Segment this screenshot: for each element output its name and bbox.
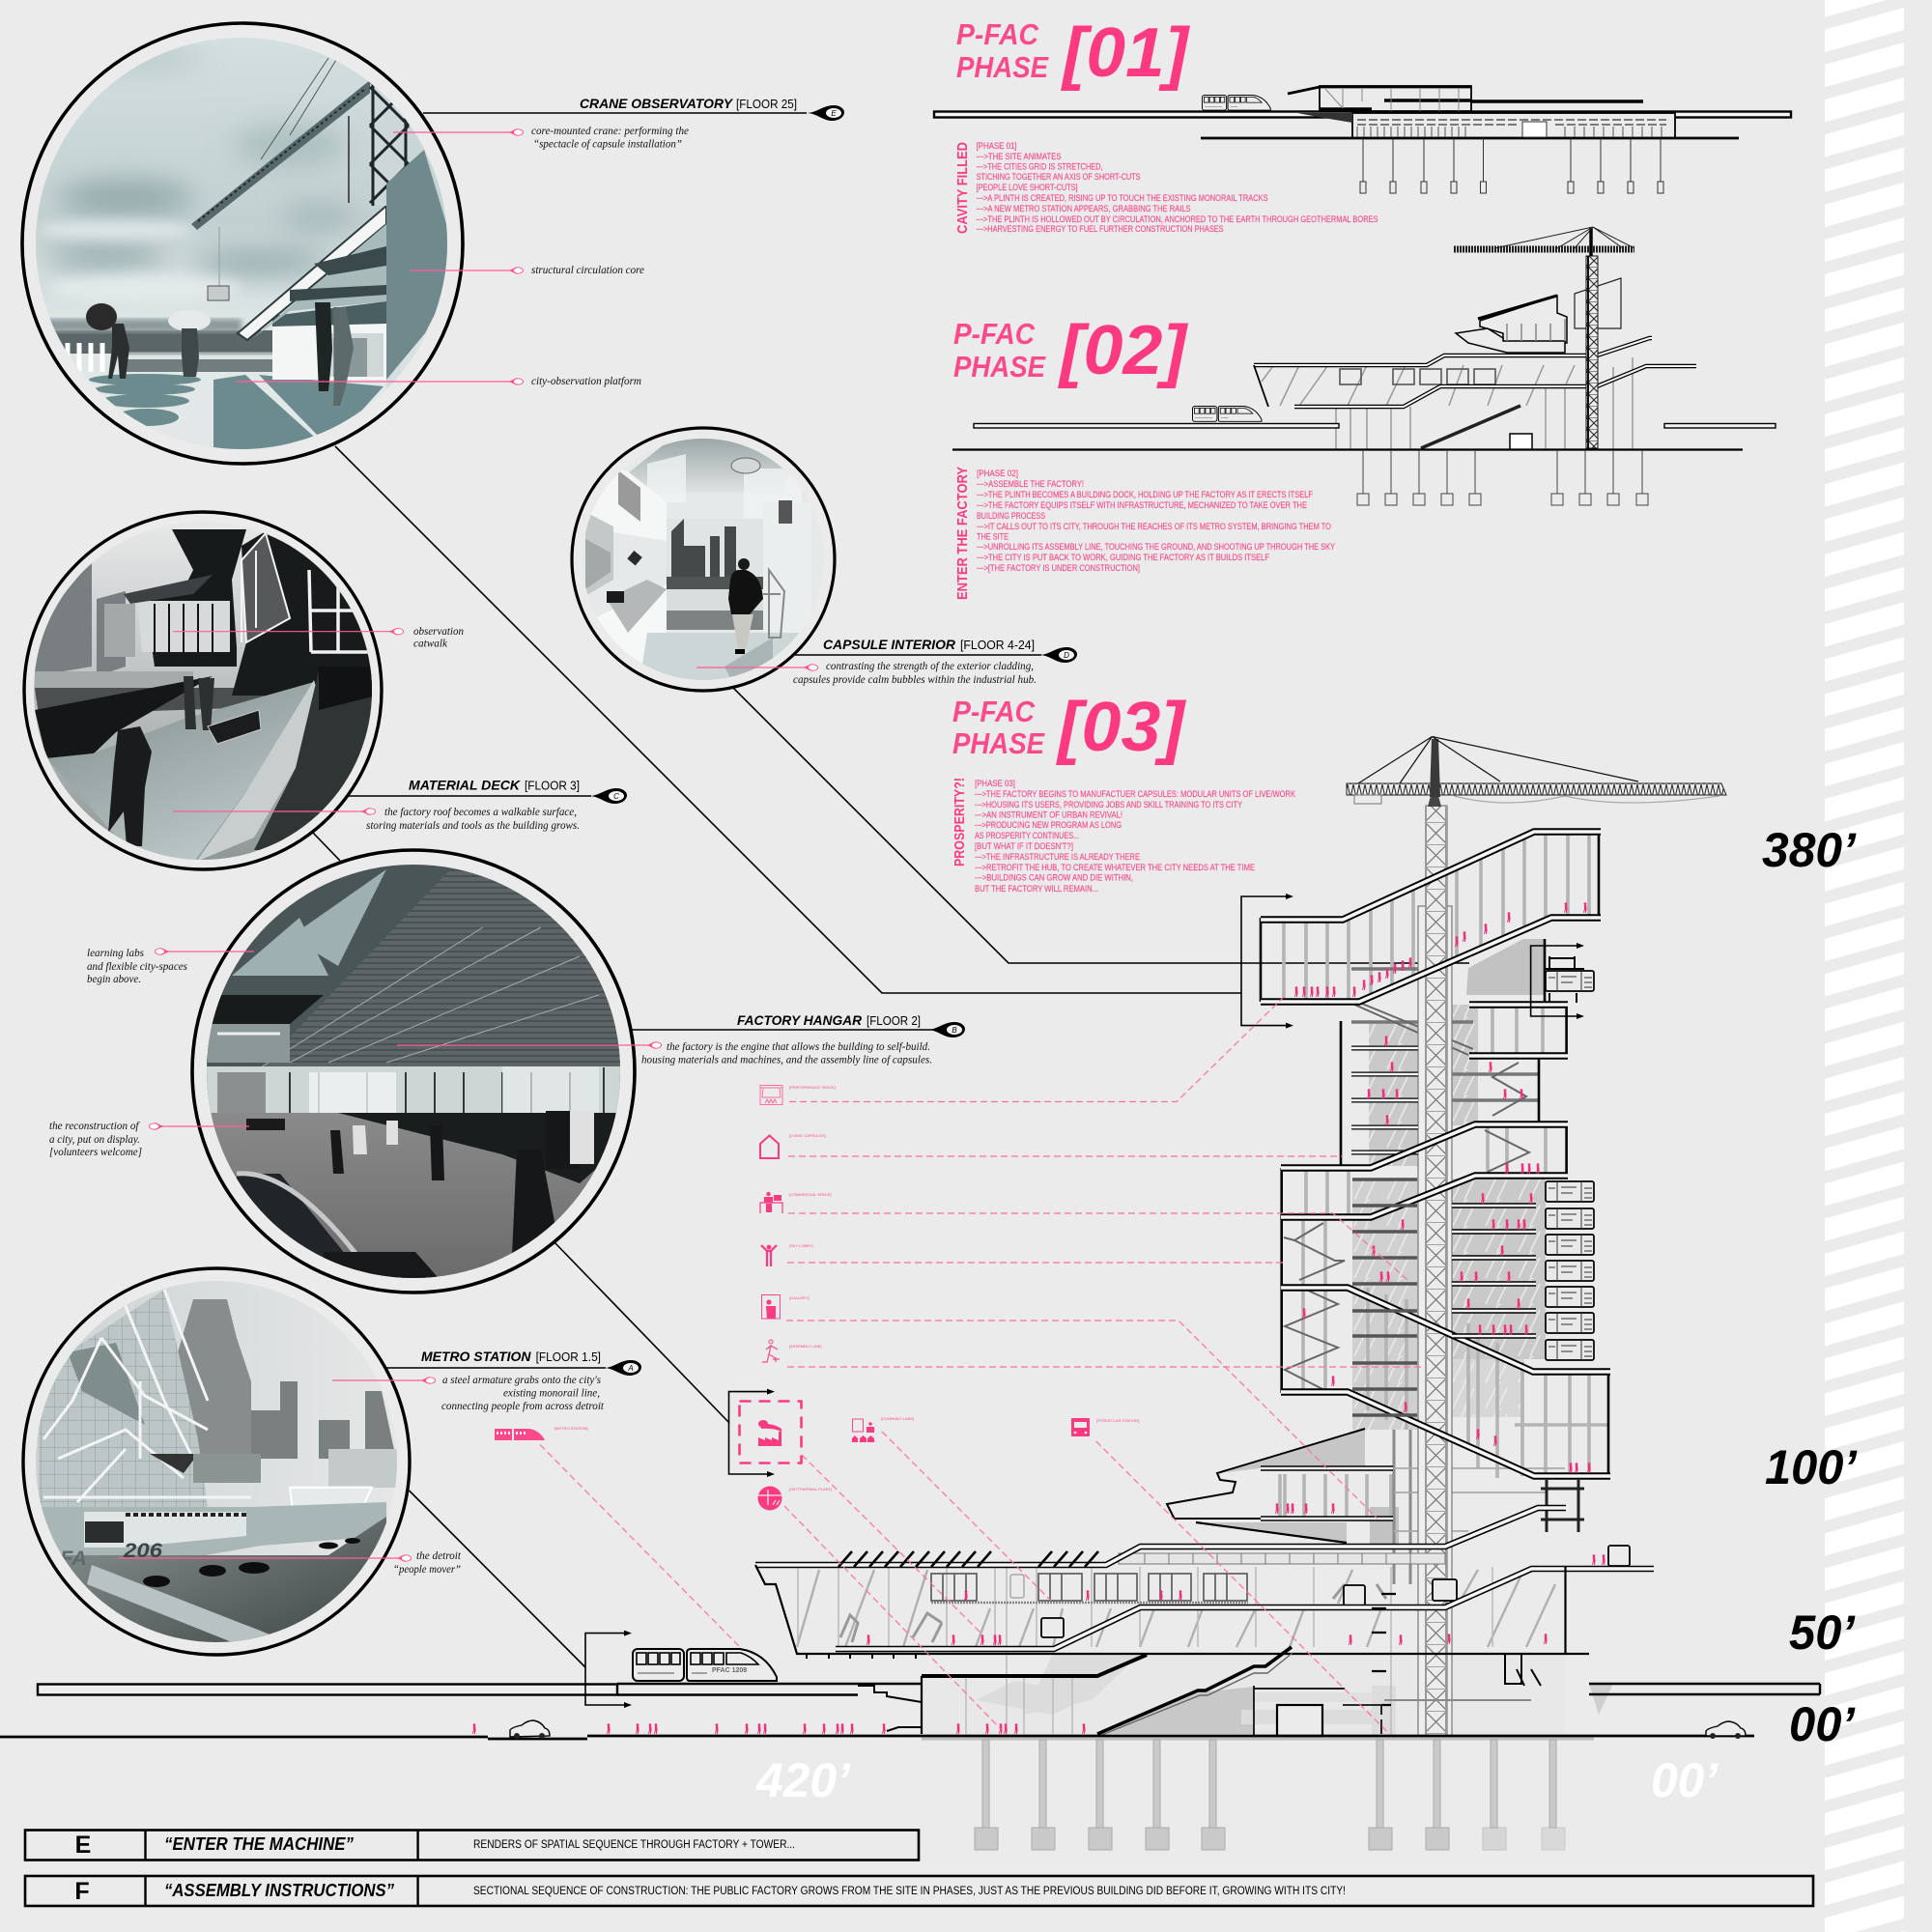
icon: commercial space: [COMMERCIAL SPACE] [789, 1192, 832, 1197]
annotation: learning labs [87, 948, 254, 985]
label: factory hangar: FACTORY HANGAR [737, 1012, 863, 1028]
icon: learning labs: [LEARNING LABS] [881, 1416, 914, 1421]
label: factory hangar: housing materials and machines, and the assembly line of capsules. [641, 1055, 932, 1066]
label: capsule interior: capsules provide calm bubbles within the industrial hub. [793, 674, 1037, 686]
text: enter the factory [954, 467, 1336, 600]
icon: assembly line: [ASSEMBLY LINE] [789, 1344, 821, 1349]
tower crane mast [1418, 806, 1452, 1736]
label: material deck [173, 777, 627, 832]
text: cavity filled: --->A NEW METRO STATION APPEARS, GRABBING THE RAILS [977, 204, 1191, 214]
heading: phase 02 [953, 312, 1188, 389]
text: enter the factory: --->THE FACTORY EQUIPS ITSELF WITH INFRASTRUCTURE, MECHANIZED TO TAKE OVER THE [977, 500, 1307, 511]
height marker: 00 ft: 00’ [1789, 1697, 1856, 1751]
title bar: F assembly instructions [25, 1876, 1813, 1906]
text: enter the factory: --->UNROLLING ITS ASSEMBLY LINE, TOUCHING THE GROUND, AND SHOOTING UP THROUGH THE SKY [977, 542, 1336, 553]
annotation: observation catwalk [173, 626, 464, 649]
label: metro station: [FLOOR 1.5] [536, 1350, 601, 1364]
label: metro station: existing monorail line, [503, 1387, 600, 1399]
text: enter the factory: THE SITE [977, 531, 1009, 543]
label: crane observatory [423, 96, 844, 121]
text: prosperity: --->THE FACTORY BEGINS TO MANUFACTUER CAPSULES: MODULAR UNITS OF LIVE/WORK [975, 789, 1296, 800]
text: cavity filled: [PEOPLE LOVE SHORT-CUTS] [977, 183, 1078, 193]
icon: living capsules [760, 1133, 826, 1158]
heading: phase 01: P-FAC [956, 17, 1039, 51]
render: factory hangar [192, 850, 635, 1293]
car right [1706, 1721, 1746, 1739]
title bar: E enter the machine [25, 1830, 919, 1861]
heading: phase 02: [02] [1058, 312, 1188, 389]
text: cavity filled: CAVITY FILLED [954, 142, 971, 234]
height marker: 380 ft: 380’ [1762, 823, 1857, 877]
text: prosperity: --->THE INFRASTRUCTURE IS ALREADY THERE [975, 852, 1140, 863]
text: prosperity: BUT THE FACTORY WILL REMAIN... [975, 884, 1098, 895]
text: enter the factory: --->THE CITY IS PUT BACK TO WORK, GUIDING THE FACTORY AS IT BUILDS ITSELF [977, 553, 1269, 563]
heading: phase 01 [956, 14, 1190, 92]
text: enter the factory: ENTER THE FACTORY [954, 467, 971, 600]
text: prosperity: --->HOUSING ITS USERS, PROVIDING JOBS AND SKILL TRAINING TO ITS CITY [975, 800, 1243, 810]
ground line [0, 1727, 1754, 1739]
mast lattice [1425, 806, 1447, 1736]
icon: factory [740, 1401, 802, 1463]
section drawing: factory and tower, phase 03 [0, 736, 1820, 1850]
label: metro station: METRO STATION [421, 1349, 531, 1364]
icon: streetcar station [1071, 1418, 1139, 1436]
annotation: observation catwalk: catwalk [413, 638, 448, 649]
text: cavity filled [954, 141, 1378, 235]
label: crane observatory: CRANE OBSERVATORY [580, 96, 734, 111]
render: metro station: 206 [123, 1540, 162, 1562]
text: prosperity: [PHASE 03] [975, 779, 1015, 789]
label: crane observatory: [FLOOR 25] [736, 97, 797, 111]
label: crane observatory: E [831, 109, 837, 118]
text: prosperity: --->PRODUCING NEW PROGRAM AS LONG [975, 820, 1122, 831]
annotation: core-mounted crane [393, 126, 689, 151]
main monorail train: PFAC 1208 [712, 1667, 747, 1674]
label: capsule interior: [FLOOR 4-24] [960, 638, 1035, 652]
label: capsule interior: contrasting the strength of the exterior cladding, [826, 661, 1034, 672]
heading: phase 02: P-FAC [953, 317, 1036, 351]
label: material deck: MATERIAL DECK [409, 777, 521, 792]
text: prosperity: [BUT WHAT IF IT DOESN'T?] [975, 841, 1073, 852]
label: capsule interior: CAPSULE INTERIOR [823, 637, 956, 652]
icon: gallery: [GALLERY] [789, 1295, 810, 1300]
annotation: city-observation platform [236, 376, 641, 387]
heading: phase 01: PHASE [956, 50, 1049, 84]
icon: metro station train [495, 1426, 588, 1440]
title bar: E enter the machine: RENDERS OF SPATIAL SEQUENCE THROUGH FACTORY + TOWER... [473, 1839, 795, 1851]
heading: phase 03: P-FAC [952, 695, 1036, 728]
icon: geothermal plant [757, 1486, 832, 1511]
annotation: learning labs: learning labs [87, 948, 145, 959]
annotation: detroit people mover: the detroit [416, 1550, 462, 1562]
annotation: structural circulation core: structural circulation core [531, 265, 644, 276]
annotation: detroit people mover: “people mover” [393, 1564, 461, 1576]
text: enter the factory: --->IT CALLS OUT TO ITS CITY, THROUGH THE REACHES OF ITS METRO SYSTEM, BRINGING THEM TO [977, 522, 1331, 532]
icon: geothermal plant: [GEOTHERMAL PLANT] [789, 1487, 832, 1492]
label: capsule interior [696, 637, 1077, 686]
icon: assembly line [762, 1340, 821, 1362]
icon: performance space [760, 1085, 836, 1105]
annotation: city-observation platform: city-observation platform [531, 376, 641, 387]
text: prosperity: --->AN INSTRUMENT OF URBAN REVIVAL! [975, 810, 1122, 821]
icon: streetcar station: [STREETCAR STATION] [1096, 1418, 1139, 1423]
heading: phase 03: PHASE [952, 726, 1045, 760]
icon: learning labs [852, 1416, 914, 1442]
label: material deck: C [613, 792, 619, 801]
title bar: E enter the machine: E [75, 1832, 91, 1859]
lower right cross frames [1541, 1480, 1584, 1532]
width marker: 420 ft: 420’ [755, 1753, 851, 1807]
label: metro station [332, 1349, 641, 1412]
heading: phase 03 [952, 689, 1186, 766]
heading: phase 03: [03] [1056, 689, 1186, 766]
text: prosperity: --->BUILDINGS CAN GROW AND DIE WITHIN, [975, 873, 1133, 883]
label: factory hangar: B [952, 1026, 957, 1035]
render: metro station [23, 1268, 410, 1662]
heading: phase 02: PHASE [953, 350, 1046, 384]
cross bracing [1284, 1004, 1529, 1392]
main monorail train [633, 1649, 777, 1681]
label: metro station: a steel armature grabs onto the city's [442, 1375, 601, 1386]
label: metro station: A [627, 1364, 634, 1373]
gray tower core [1196, 939, 1546, 1546]
render: metro station: FA [60, 1548, 87, 1570]
section drawing: phase 02 [952, 227, 1776, 505]
annotation: detroit people mover [118, 1550, 462, 1576]
monorail deck [38, 1684, 1820, 1702]
label: factory hangar: [FLOOR 2] [867, 1013, 921, 1028]
label: material deck: [FLOOR 3] [525, 779, 580, 792]
text: enter the factory: --->ASSEMBLE THE FACTORY! [977, 479, 1084, 490]
render: crane observatory [22, 23, 463, 464]
icon: sky lobby [761, 1243, 813, 1266]
interior columns [1280, 832, 1608, 1584]
icon: metro station train: [METRO STATION] [554, 1426, 588, 1431]
walls [1261, 832, 1608, 1476]
label: material deck: storing materials and tools as the building grows. [366, 820, 580, 832]
icon: commercial space [760, 1192, 832, 1213]
label: factory hangar [397, 1012, 965, 1066]
icon: living capsules: [LIVING CAPSULES] [789, 1133, 826, 1138]
icon: sky lobby: [SKY LOBBY] [789, 1243, 813, 1248]
capsules [1546, 956, 1594, 1360]
text: cavity filled: --->THE PLINTH IS HOLLOWED OUT BY CIRCULATION, ANCHORED TO THE EARTH THROUGH GEOTHERMAL BORES [977, 214, 1378, 225]
people [472, 902, 1605, 1734]
annotation: core-mounted crane: core-mounted crane: performing the [531, 126, 689, 137]
plinth shading [922, 1654, 1613, 1736]
heading: phase 01: [01] [1061, 14, 1190, 92]
height marker: 50 ft: 50’ [1789, 1605, 1856, 1660]
annotation: reconstruction of a city: a city, put on display. [49, 1134, 140, 1146]
annotation: reconstruction of a city: [volunteers welcome] [49, 1147, 142, 1158]
factory structure [797, 1546, 1630, 1734]
section arrows [585, 894, 1584, 1708]
annotation: learning labs: begin above. [87, 974, 141, 985]
render: capsule interior [572, 428, 835, 696]
label: metro station: connecting people from across detroit [441, 1401, 605, 1412]
tower slabs [1261, 832, 1610, 1519]
text: cavity filled: --->A PLINTH IS CREATED, RISING UP TO TOUCH THE EXISTING MONORAIL TRACKS [977, 193, 1268, 204]
icon: performance space: [PERFORMANCE SPACE] [789, 1085, 836, 1090]
width marker: 00 ft: 00’ [1651, 1753, 1719, 1807]
wedge lobby [1167, 1429, 1365, 1519]
annotation: reconstruction of a city: the reconstruction of [49, 1121, 140, 1132]
text: prosperity: --->RETROFIT THE HUB, TO CREATE WHATEVER THE CITY NEEDS AT THE TIME [975, 863, 1255, 873]
connector lines between renders and section [313, 446, 1469, 1667]
text: cavity filled: --->THE SITE ANIMATES [977, 152, 1062, 162]
render: material deck [24, 512, 382, 869]
annotation: core-mounted crane: “spectacle of capsule installation” [533, 139, 682, 151]
text: prosperity [952, 778, 1296, 895]
section drawing: phase 01 [934, 86, 1791, 193]
program leader lines [540, 997, 1424, 1735]
annotation: structural circulation core [410, 265, 644, 276]
text: prosperity: PROSPERITY?! [952, 778, 968, 867]
title bar: F assembly instructions: SECTIONAL SEQUENCE OF CONSTRUCTION: THE PUBLIC FACTORY GROWS FROM THE SITE IN PHASES, JUST AS THE PREVIOUS BUILDING DID BEFORE IT, GROWING WITH ITS CITY! [473, 1886, 1346, 1897]
label: factory hangar: the factory is the engine that allows the building to self-build. [667, 1041, 930, 1053]
icon: gallery [761, 1294, 810, 1319]
car left [510, 1720, 550, 1739]
title bar: F assembly instructions: F [74, 1878, 90, 1905]
text: enter the factory: --->THE PLINTH BECOMES A BUILDING DOCK, HOLDING UP THE FACTORY AS IT ERECTS ITSELF [977, 490, 1313, 500]
crane jib [1347, 736, 1726, 807]
title bar: F assembly instructions: “ASSEMBLY INSTRUCTIONS” [164, 1881, 394, 1900]
annotation: observation catwalk: observation [413, 626, 464, 638]
title bar: E enter the machine: “ENTER THE MACHINE” [164, 1834, 354, 1854]
text: cavity filled: [PHASE 01] [977, 141, 1017, 152]
text: enter the factory: BUILDING PROCESS [977, 511, 1045, 522]
text: prosperity: AS PROSPERITY CONTINUES... [975, 831, 1079, 841]
text: cavity filled: --->HARVESTING ENERGY TO FUEL FURTHER CONSTRUCTION PHASES [977, 224, 1224, 235]
text: enter the factory: --->[THE FACTORY IS UNDER CONSTRUCTION] [977, 563, 1140, 574]
height marker: 100 ft: 100’ [1765, 1440, 1858, 1494]
annotation: learning labs: and flexible city-spaces [87, 961, 187, 973]
text: enter the factory: [PHASE 02] [977, 469, 1018, 479]
factory slabs [755, 1508, 1654, 1736]
text: cavity filled: STICHING TOGETHER AN AXIS OF SHORT-CUTS [977, 172, 1141, 183]
foundation piles [975, 1740, 1565, 1850]
annotation: reconstruction of a city [49, 1121, 249, 1158]
text: cavity filled: --->THE CITIES GRID IS STRETCHED, [977, 162, 1103, 172]
label: material deck: the factory roof becomes a walkable surface, [384, 807, 577, 818]
label: capsule interior: D [1064, 651, 1069, 660]
